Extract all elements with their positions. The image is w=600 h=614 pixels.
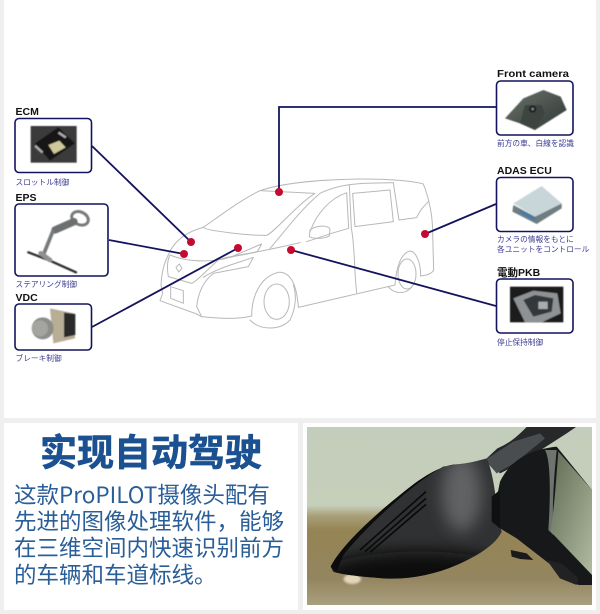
icon: ADAS control unit: [512, 186, 562, 224]
text block: [14, 478, 284, 590]
heading: 实现自动驾驶: [40, 422, 262, 476]
callout: ECM: スロットル制御: [16, 177, 70, 188]
callout: VDC: [15, 292, 92, 364]
callout: electric PKB: 停止保持制御: [497, 337, 543, 348]
text block: 先进的图像处理软件，能够: [14, 504, 284, 536]
icon: steering assembly: [28, 209, 91, 272]
callout: EPS: [15, 192, 108, 290]
callout: VDC: VDC: [16, 292, 38, 304]
callout: VDC: ブレーキ制御: [16, 353, 62, 364]
callout: EPS: EPS: [16, 192, 37, 204]
callout: ADAS ECU: [496, 165, 590, 255]
callout: ECM: [15, 106, 92, 188]
photo: camera behind rear-view mirror: [307, 427, 592, 605]
panel: description: [4, 422, 298, 610]
connector lines: [92, 107, 496, 327]
icon: ECM unit: [31, 126, 77, 163]
callout: ECM: ECM: [16, 106, 39, 118]
callout: ADAS ECU: ADAS ECU: [497, 165, 552, 177]
text block: 的车辆和车道标线。: [14, 558, 217, 590]
text block: 在三维空间内快速识别前方: [14, 531, 284, 563]
callout: Front camera: [496, 68, 574, 149]
callout: ADAS ECU: 各ユニットをコントロール: [497, 244, 590, 255]
illustration: car outline: [160, 179, 434, 328]
panel: photo frame: [303, 423, 596, 610]
callout: EPS: ステアリング制御: [16, 279, 77, 290]
callout: electric PKB: 電動PKB: [497, 266, 541, 279]
callout: electric PKB: [496, 266, 573, 348]
text block: 这款ProPILOT摄像头配有: [14, 478, 270, 510]
icon: brake unit: [32, 308, 75, 343]
icon: front camera module: [505, 90, 567, 130]
icon: parking brake console: [510, 287, 563, 322]
marker dots on car: [180, 188, 429, 258]
callout: ADAS ECU: カメラの情報をもとに: [497, 234, 574, 245]
callout: Front camera: 前方の車、白線を認識: [497, 138, 574, 149]
callout: Front camera: Front camera: [497, 68, 569, 80]
panel: vehicle system diagram: [4, 0, 596, 418]
